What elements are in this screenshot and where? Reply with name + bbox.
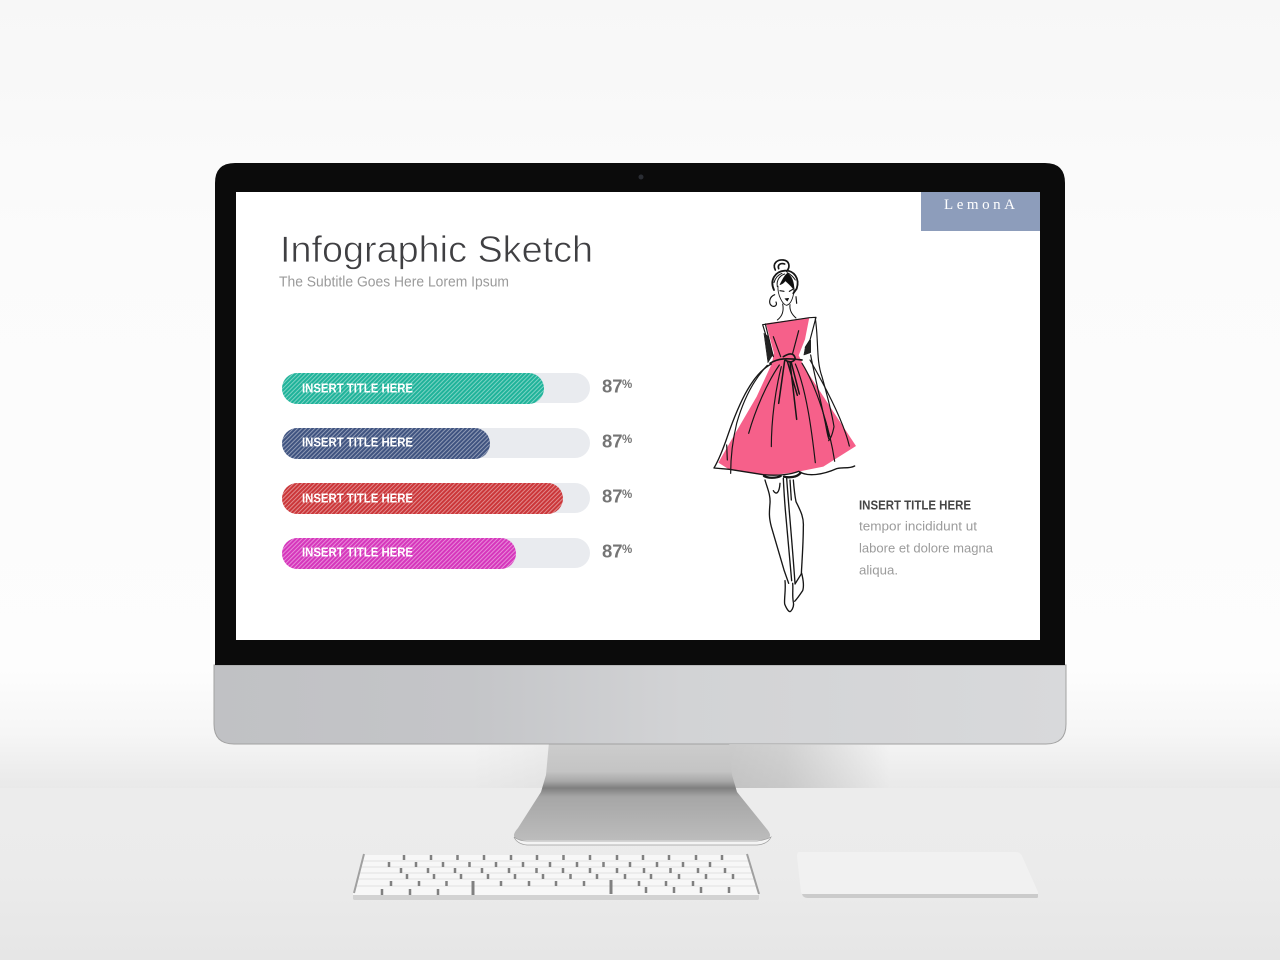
bar 4: magenta [282,538,632,569]
bar chart [282,373,632,569]
face [778,286,794,305]
bar 1: teal: 87 [602,376,623,396]
brand tab: LemonA [944,197,1015,213]
monitor stand [514,742,771,845]
callout text: INSERT TITLE HERE [859,498,971,512]
curl and earring [770,295,797,306]
right arm [811,319,834,441]
screen [236,192,1040,640]
legs [765,480,789,583]
bun [774,260,789,271]
keyboard [353,854,759,900]
bar 4: magenta: INSERT TITLE HERE [302,546,413,560]
bodice [763,317,816,357]
fashion sketch illustration [714,260,856,612]
shoes [785,581,794,612]
bar 1: teal [282,373,632,404]
skirt outline [714,364,855,475]
bar 2: navy: % [622,434,632,446]
neck and shoulders [777,304,796,320]
bar 4: magenta: 87 [602,540,623,562]
bar 3: red: 87 [602,486,623,506]
subtitle: The Subtitle Goes Here Lorem Ipsum [279,274,509,290]
waist and bow [770,354,802,363]
bar 2: navy: INSERT TITLE HERE [302,436,413,450]
bar 1: teal: % [622,379,632,391]
brand tab [921,192,1040,231]
bar 3: red: INSERT TITLE HERE [302,492,413,506]
monitor bezel [215,163,1065,665]
bar 3: red [282,483,632,514]
bar 2: navy: 87 [602,430,623,452]
hair [772,271,798,293]
webcam [638,174,644,180]
trackpad [797,852,1038,898]
title: Infographic Sketch [280,229,593,270]
dress fill [718,317,856,475]
callout text: tempor incididunt ut [859,518,977,534]
callout text [859,498,994,578]
bar 4: magenta: % [622,544,632,556]
bar 2: navy [282,428,632,459]
bar 1: teal: INSERT TITLE HERE [302,382,413,396]
callout text: labore et dolore magna [859,540,994,556]
monitor chin [214,665,1066,744]
callout text: aliqua. [859,562,898,578]
monitor [214,163,1066,744]
skirt pleats [727,360,849,463]
left arm shadow [764,333,773,363]
bar 3: red: % [622,489,632,501]
under skirt [764,473,801,478]
